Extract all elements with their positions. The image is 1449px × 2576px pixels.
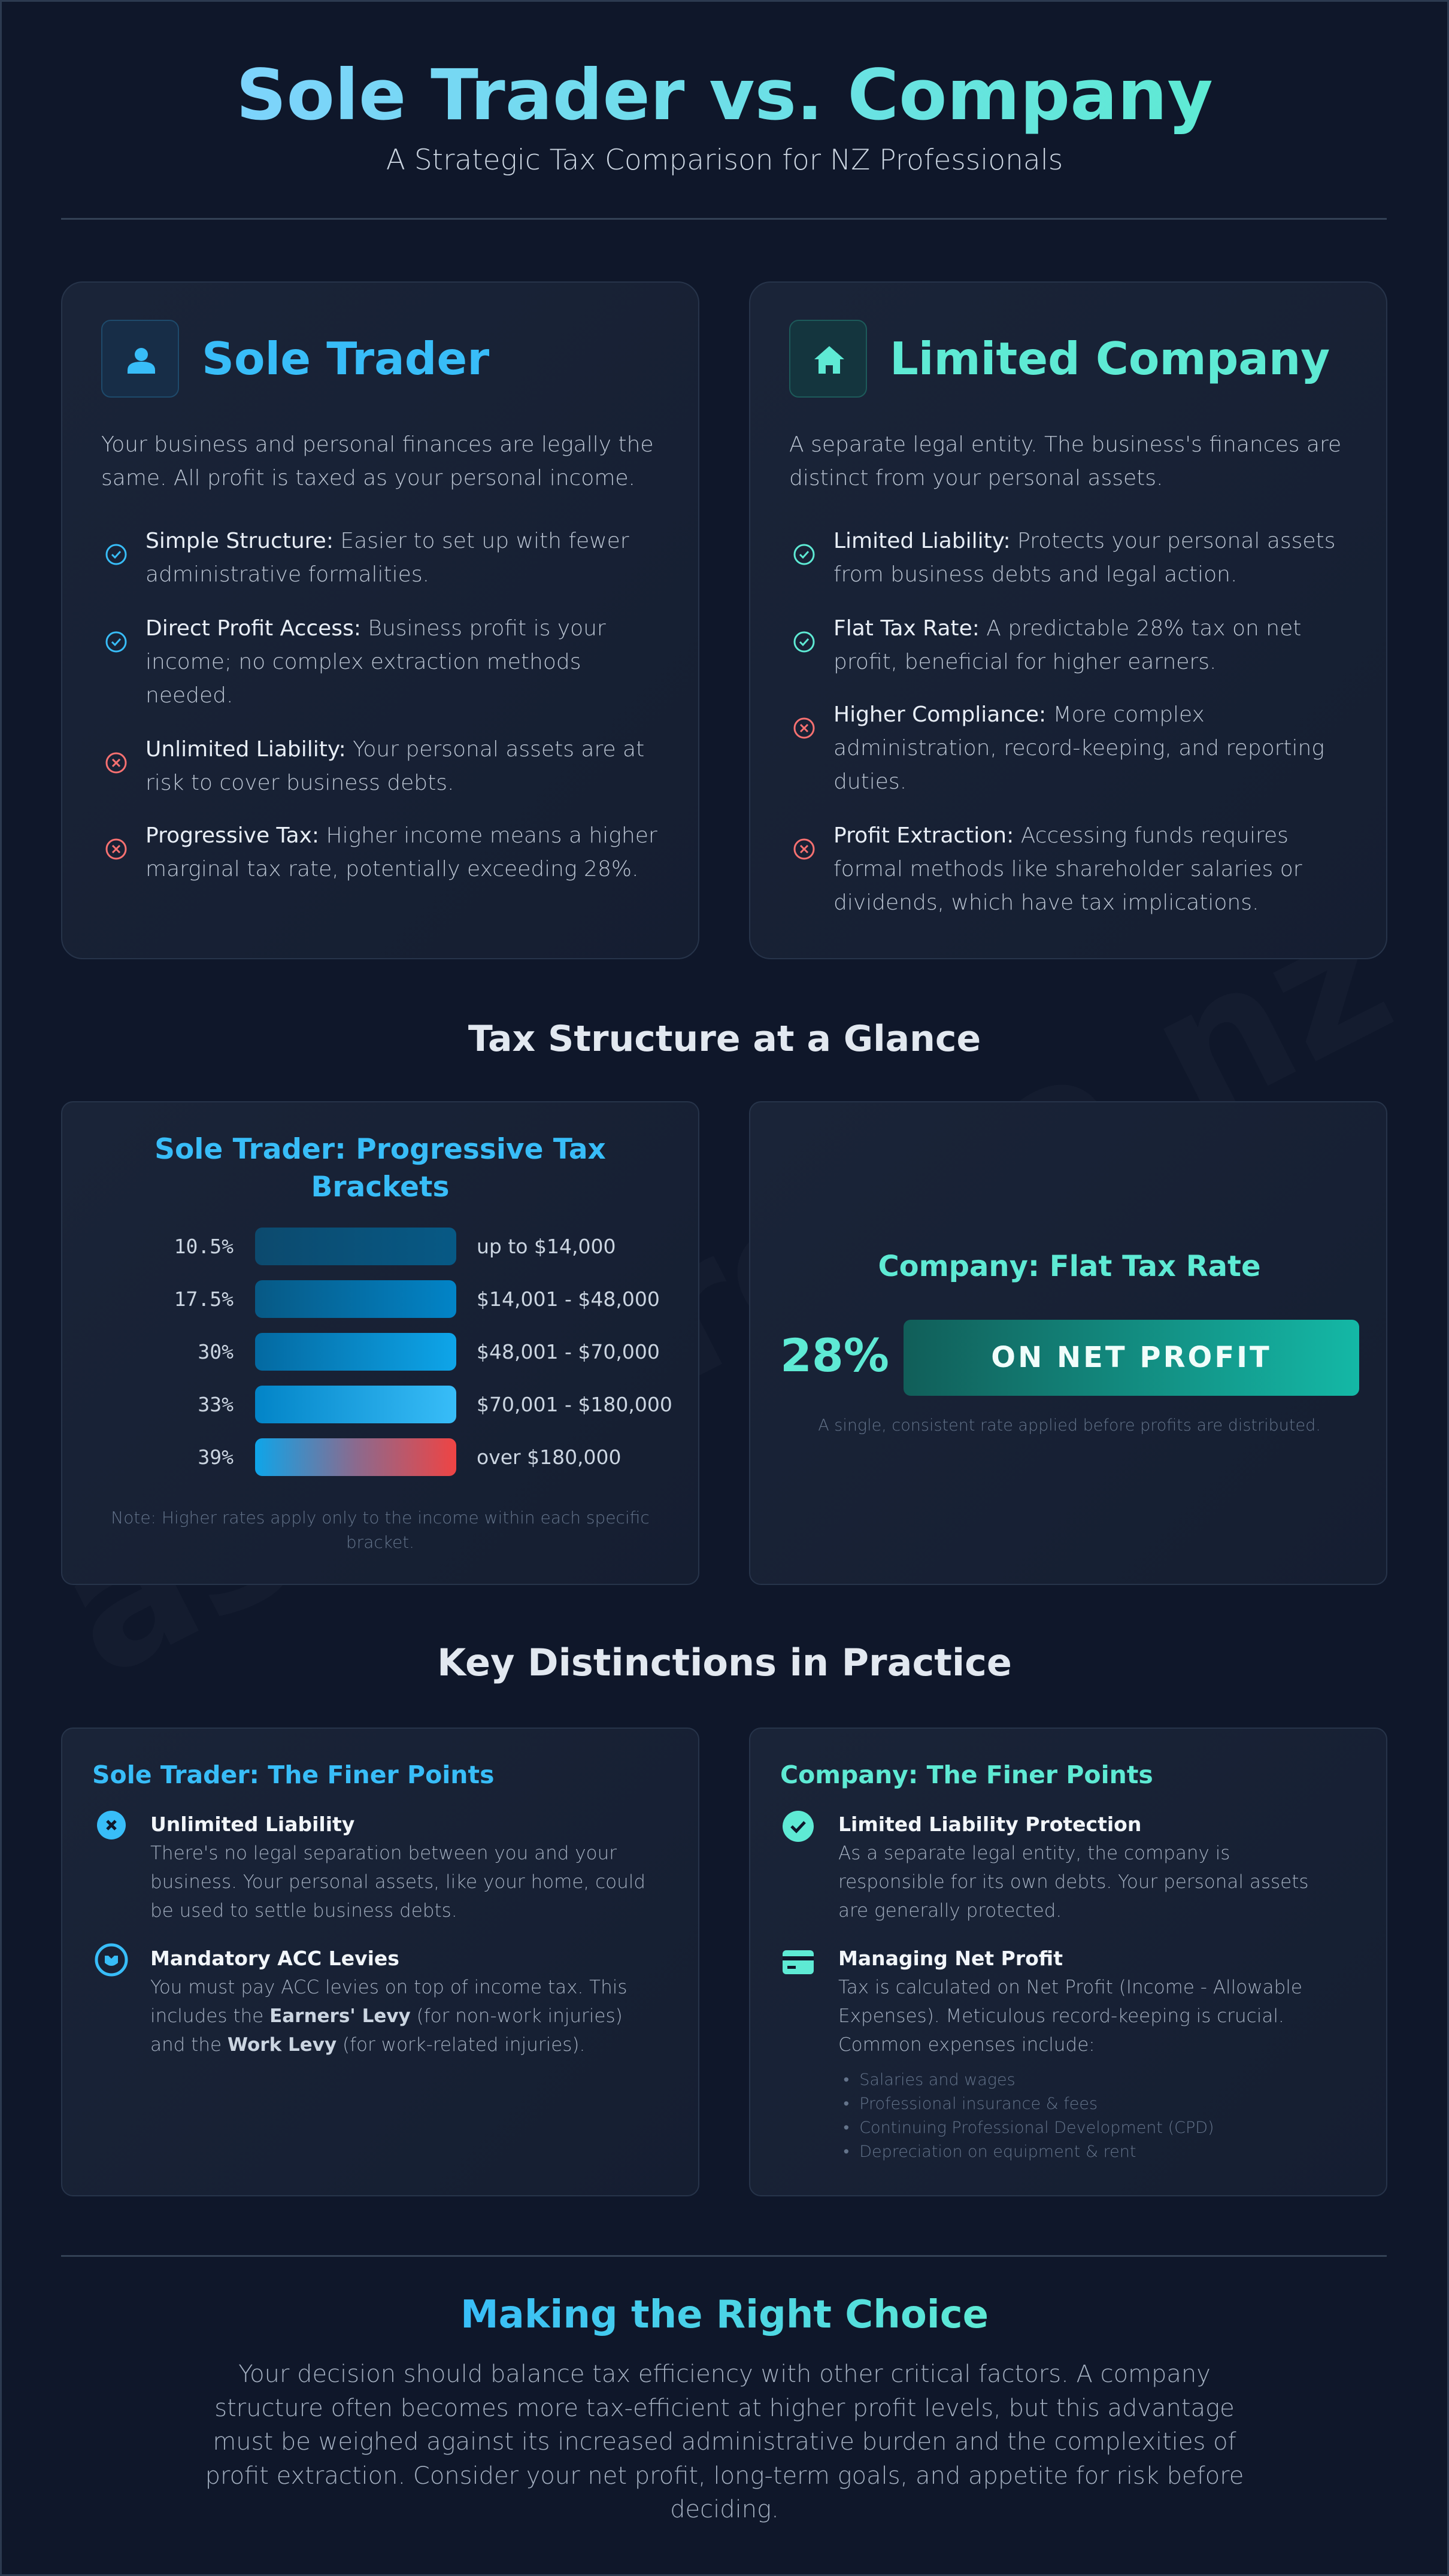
- conclusion paragraph: must be weighed against its increased administrative burden and the complexities of: [213, 2428, 1236, 2456]
- bar chart: $14,001 - $48,000: [477, 1287, 660, 1311]
- item: managing net profit: Common expenses include:: [838, 2034, 1095, 2056]
- title: Sole Trader vs. Company: [236, 54, 1213, 136]
- on net profit box: [904, 1320, 1359, 1396]
- flat tax heading: Company: Flat Tax Rate: [878, 1250, 1261, 1283]
- icon: card: [783, 1950, 814, 1974]
- description: Your business and personal finances are legally the: [101, 432, 654, 457]
- panel: company finer points: [749, 1728, 1387, 2196]
- panel: limited company: [749, 281, 1387, 959]
- description: [789, 432, 1341, 490]
- bullet list: administration, record-keeping, and reporting: [833, 736, 1324, 760]
- bullet list: Flat Tax Rate: A predictable 28% tax on net: [833, 616, 1301, 641]
- chart title: [154, 1133, 606, 1204]
- conclusion paragraph: structure often becomes more tax-efficient at higher profit levels, but this advantage: [214, 2394, 1235, 2422]
- bullet list: marginal tax rate, potentially exceeding 28%.: [145, 857, 638, 881]
- bullet list: Progressive Tax: Higher income means a higher: [145, 823, 657, 848]
- conclusion paragraph: profit extraction. Consider your net profit, long-term goals, and appetite for risk before: [205, 2462, 1244, 2490]
- bullet list: Higher Compliance: More complex: [833, 702, 1205, 727]
- item: limited liability protection: [838, 1813, 1309, 1922]
- bar chart: 10.5%: [174, 1235, 234, 1258]
- panel: sole trader: [61, 281, 699, 959]
- item: ACC levies: You must pay ACC levies on top of income tax. This: [150, 1977, 628, 1998]
- description: distinct from your personal assets.: [789, 466, 1163, 490]
- icon: house: [789, 320, 867, 398]
- expense list: [844, 2071, 1214, 2161]
- caption: A single, consistent rate applied before profits are distributed.: [818, 1416, 1321, 1435]
- item: managing net profit: Expenses). Meticulous record-keeping is crucial.: [838, 2005, 1284, 2027]
- item: limited liability protection: are generally protected.: [838, 1900, 1062, 1922]
- bar chart: $70,001 - $180,000: [477, 1393, 672, 1416]
- item: limited liability protection: responsible for its own debts. Your personal assets: [838, 1871, 1309, 1893]
- description: same. All profit is taxed as your personal income.: [101, 466, 635, 490]
- description: [101, 432, 654, 490]
- bullet list: Simple Structure: Easier to set up with fewer: [145, 529, 629, 553]
- bar chart: over $180,000: [477, 1445, 622, 1469]
- heading: Sole Trader: [202, 332, 489, 385]
- bullet list: profit, beneficial for higher earners.: [833, 650, 1216, 674]
- item: managing net profit: [838, 1947, 1302, 2161]
- bullet list: risk to cover business debts.: [145, 771, 454, 795]
- panel: flat tax: [749, 1101, 1387, 1585]
- icon: acc shield: [95, 1944, 128, 1976]
- conclusion paragraph: Your decision should balance tax efficiency with other critical factors. A company: [238, 2360, 1211, 2388]
- item: ACC levies: includes the Earners' Levy (for non-work injuries): [150, 2005, 623, 2027]
- bullet list: [794, 529, 1335, 915]
- chart note: bracket.: [346, 1532, 414, 1552]
- bar chart: [174, 1228, 672, 1476]
- bullet list: Direct Profit Access: Business profit is your: [145, 616, 606, 641]
- bullet list: Profit Extraction: Accessing funds requires: [833, 823, 1289, 848]
- conclusion paragraph: deciding.: [670, 2496, 779, 2523]
- icon: person: [101, 320, 179, 398]
- chart note: Note: Higher rates apply only to the income within each specific: [111, 1508, 650, 1528]
- item: unlimited liability: There's no legal separation between you and your: [150, 1842, 617, 1864]
- bar chart: 30%: [198, 1340, 234, 1363]
- on net profit box: ON NET PROFIT: [991, 1341, 1272, 1374]
- heading: key distinctions: Key Distinctions in Practice: [437, 1641, 1012, 1684]
- finer heading: Sole Trader: The Finer Points: [92, 1760, 494, 1789]
- bullet list: dividends, which have tax implications.: [833, 890, 1259, 915]
- item: unlimited liability: be used to settle business debts.: [150, 1900, 457, 1922]
- panel: progressive tax chart: [61, 1101, 699, 1585]
- bar chart: 33%: [198, 1393, 234, 1416]
- bar chart: $48,001 - $70,000: [477, 1340, 660, 1363]
- heading: making the right choice: Making the Right Choice: [460, 2293, 989, 2337]
- item: unlimited liability: business. Your personal assets, like your home, could: [150, 1871, 645, 1893]
- description: A separate legal entity. The business's finances are: [789, 432, 1341, 457]
- bullet list: [105, 529, 657, 881]
- bullet list: from business debts and legal action.: [833, 562, 1237, 587]
- bullet list: duties.: [833, 769, 907, 794]
- chart title: Brackets: [311, 1171, 449, 1204]
- item: managing net profit: Tax is calculated on Net Profit (Income - Allowable: [838, 1977, 1302, 1998]
- heading: Limited Company: [890, 332, 1330, 385]
- heading: tax structure: Tax Structure at a Glance: [468, 1018, 981, 1060]
- item: ACC levies: Mandatory ACC Levies: [150, 1947, 399, 1970]
- expense list: • Salaries and wages: [844, 2071, 1015, 2089]
- subtitle: A Strategic Tax Comparison for NZ Professionals: [386, 144, 1063, 177]
- item: managing net profit: Managing Net Profit: [838, 1947, 1063, 1970]
- item: ACC levies: [150, 1947, 628, 2056]
- conclusion paragraph: [205, 2360, 1244, 2523]
- finer heading: Company: The Finer Points: [780, 1760, 1153, 1789]
- item: unlimited liability: Unlimited Liability: [150, 1813, 354, 1836]
- bullet list: income; no complex extraction methods: [145, 650, 581, 674]
- bullet list: Unlimited Liability: Your personal assets are at: [145, 737, 644, 762]
- expense list: • Professional insurance & fees: [844, 2095, 1098, 2113]
- 28% figure: 28%: [780, 1329, 889, 1382]
- expense list: • Depreciation on equipment & rent: [844, 2142, 1136, 2161]
- bullet list: needed.: [145, 683, 233, 708]
- item: limited liability protection: As a separate legal entity, the company is: [838, 1842, 1230, 1864]
- chart note: [111, 1508, 650, 1552]
- icon: check circle: [783, 1811, 814, 1842]
- expense list: • Continuing Professional Development (CPD): [844, 2119, 1214, 2137]
- bar chart: up to $14,000: [477, 1235, 616, 1258]
- bar chart: 39%: [198, 1445, 234, 1469]
- chart title: Sole Trader: Progressive Tax: [154, 1133, 606, 1166]
- item: ACC levies: and the Work Levy (for work-related injuries).: [150, 2034, 585, 2056]
- bullet list: formal methods like shareholder salaries or: [833, 857, 1302, 881]
- panel: sole trader finer points: [61, 1728, 699, 2196]
- item: unlimited liability: [150, 1813, 645, 1922]
- bar chart: 17.5%: [174, 1287, 234, 1311]
- watermark: asfuture.co.nz: [28, 869, 1421, 1717]
- bullet list: Limited Liability: Protects your personal assets: [833, 529, 1335, 553]
- icon: x circle: [97, 1811, 126, 1839]
- bullet list: administrative formalities.: [145, 562, 429, 587]
- item: limited liability protection: Limited Liability Protection: [838, 1813, 1141, 1836]
